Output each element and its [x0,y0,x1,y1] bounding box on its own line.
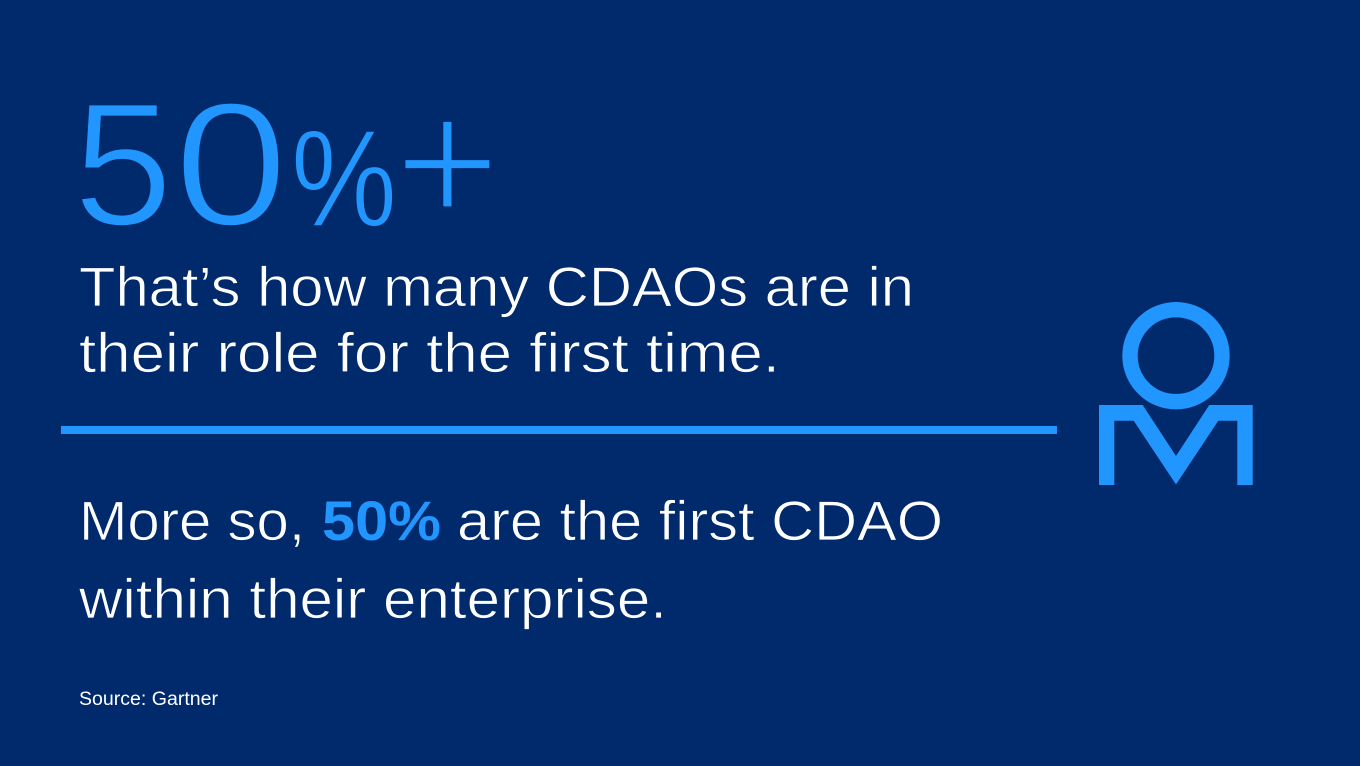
big statistic: 50%+: % [291,102,397,256]
text block: first CDAO within enterprise: within their enterprise. [78,567,667,630]
big statistic: 50%+: + [394,59,501,264]
text block: first CDAO within enterprise: 50% [322,489,441,552]
icon: person logo [1099,310,1253,485]
big statistic: 50%+ [73,59,501,264]
text block: first CDAO within enterprise: More so, [79,489,305,552]
text block: first CDAO within enterprise: are the first CDAO [457,489,943,552]
divider line [61,426,1057,434]
heading text: first-time CDAOs [79,255,914,384]
big statistic: 50%+: 0 [174,67,288,263]
heading text: first-time CDAOs: That’s how many CDAOs are in [79,255,914,318]
big statistic: 50%+: 5 [73,67,173,263]
source note: Source: Gartner [79,689,219,710]
heading text: first-time CDAOs: their role for the first time. [79,321,780,384]
text block: first CDAO within enterprise [78,489,943,630]
